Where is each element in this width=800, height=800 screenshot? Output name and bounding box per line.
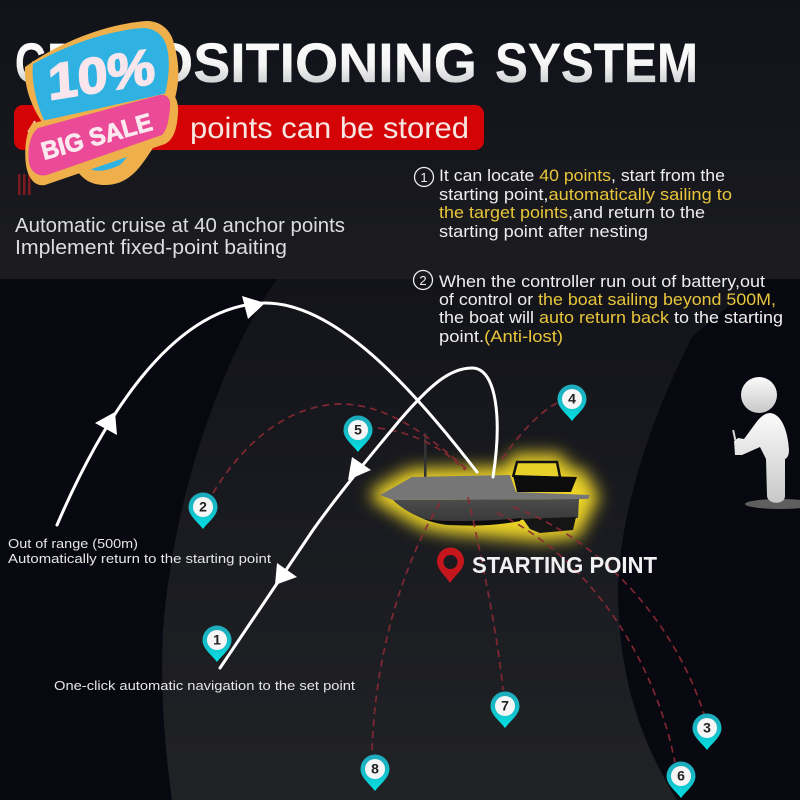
feature note 1: It can locate 40 points , start from the: [439, 167, 725, 185]
starting point marker: [437, 548, 464, 583]
pin 1: [202, 626, 232, 662]
pin 4: 4: [568, 390, 576, 406]
arrowhead lower route: [275, 563, 297, 585]
boat motor: [523, 517, 576, 533]
boat antenna: [424, 433, 426, 477]
feature note 2: When the controller run out of battery,out: [439, 273, 765, 291]
left description text: Implement fixed-point baiting: [15, 236, 287, 259]
boat hopper: [513, 462, 577, 492]
title: [15, 31, 698, 94]
pin 7: 7: [501, 698, 509, 714]
pin 5: 5: [354, 422, 362, 438]
white route: out of range return: [57, 303, 477, 525]
badge ribbon back: [25, 93, 178, 185]
label: one-click navigation: One-click automatic navigation to the set point: [54, 679, 356, 693]
boat glow: [380, 462, 590, 533]
feature note 2: [414, 270, 783, 346]
number 2: 2: [419, 273, 427, 288]
sale badge: [25, 21, 178, 185]
label: out of range: Automatically return to the starting point: [8, 552, 272, 566]
boat keel: [423, 518, 522, 526]
left description text: [15, 214, 345, 259]
pin 3: [692, 714, 722, 750]
starting point label: STARTING POINT: [472, 552, 658, 578]
number 1: [414, 168, 434, 186]
badge pink ribbon: [28, 95, 170, 175]
feature note 1: the target points ,and return to the: [439, 204, 705, 222]
badge orange back: [25, 21, 178, 185]
title: POSITIONING: [113, 31, 477, 94]
feature note 1: [414, 167, 732, 241]
controller antenna: [732, 430, 736, 440]
pin 2: [188, 492, 218, 529]
badge blue shield: [33, 28, 169, 171]
badge big sale text: BIG SALE: [38, 108, 155, 166]
boat deck: [380, 475, 590, 500]
feature note 1: starting point, automatically sailing to: [439, 186, 732, 204]
label: out of range: Out of range (500m): [8, 537, 138, 551]
feature note 2: of control or the boat sailing beyond 500M,: [439, 291, 776, 309]
number 2: [414, 270, 432, 290]
red banner: [14, 105, 484, 150]
pin 8: [360, 754, 390, 791]
label: out of range: [8, 537, 272, 566]
person head: [741, 377, 777, 413]
boat: [380, 433, 590, 533]
pin 6: [666, 762, 696, 798]
feature note 1: starting point after nesting: [439, 223, 648, 241]
person with controller: [732, 377, 800, 509]
pin 3: 3: [703, 720, 711, 736]
title: SYSTEM: [495, 31, 698, 94]
badge percent: 10%: [47, 38, 156, 111]
pin 7: [490, 692, 520, 728]
pin 4: [558, 384, 586, 421]
arrowhead up route: [95, 412, 117, 435]
ground shadow: [745, 499, 800, 509]
arrowhead top route: [242, 296, 265, 319]
feature note 2: the boat will auto return back to the starting: [439, 309, 783, 327]
decorative red stripes icon: [18, 174, 30, 195]
arrowhead mid route: [348, 457, 371, 480]
banner icon fragment: [28, 121, 35, 132]
left description text: Automatic cruise at 40 anchor points: [15, 214, 345, 237]
boat hull: [393, 499, 579, 525]
number 1: 1: [420, 170, 428, 185]
person body: [734, 413, 789, 503]
pin 2: 2: [199, 498, 207, 514]
dashed routes: [213, 403, 704, 762]
banner text: points can be stored: [190, 112, 469, 145]
pin 6: 6: [677, 768, 685, 784]
white route: one-click navigation: [220, 368, 497, 668]
feature note 2: point. (Anti-lost): [439, 328, 563, 346]
pin 8: 8: [371, 760, 379, 776]
pin 5: [344, 416, 372, 452]
pin 1: 1: [213, 632, 221, 648]
title: GPS: [15, 31, 103, 94]
